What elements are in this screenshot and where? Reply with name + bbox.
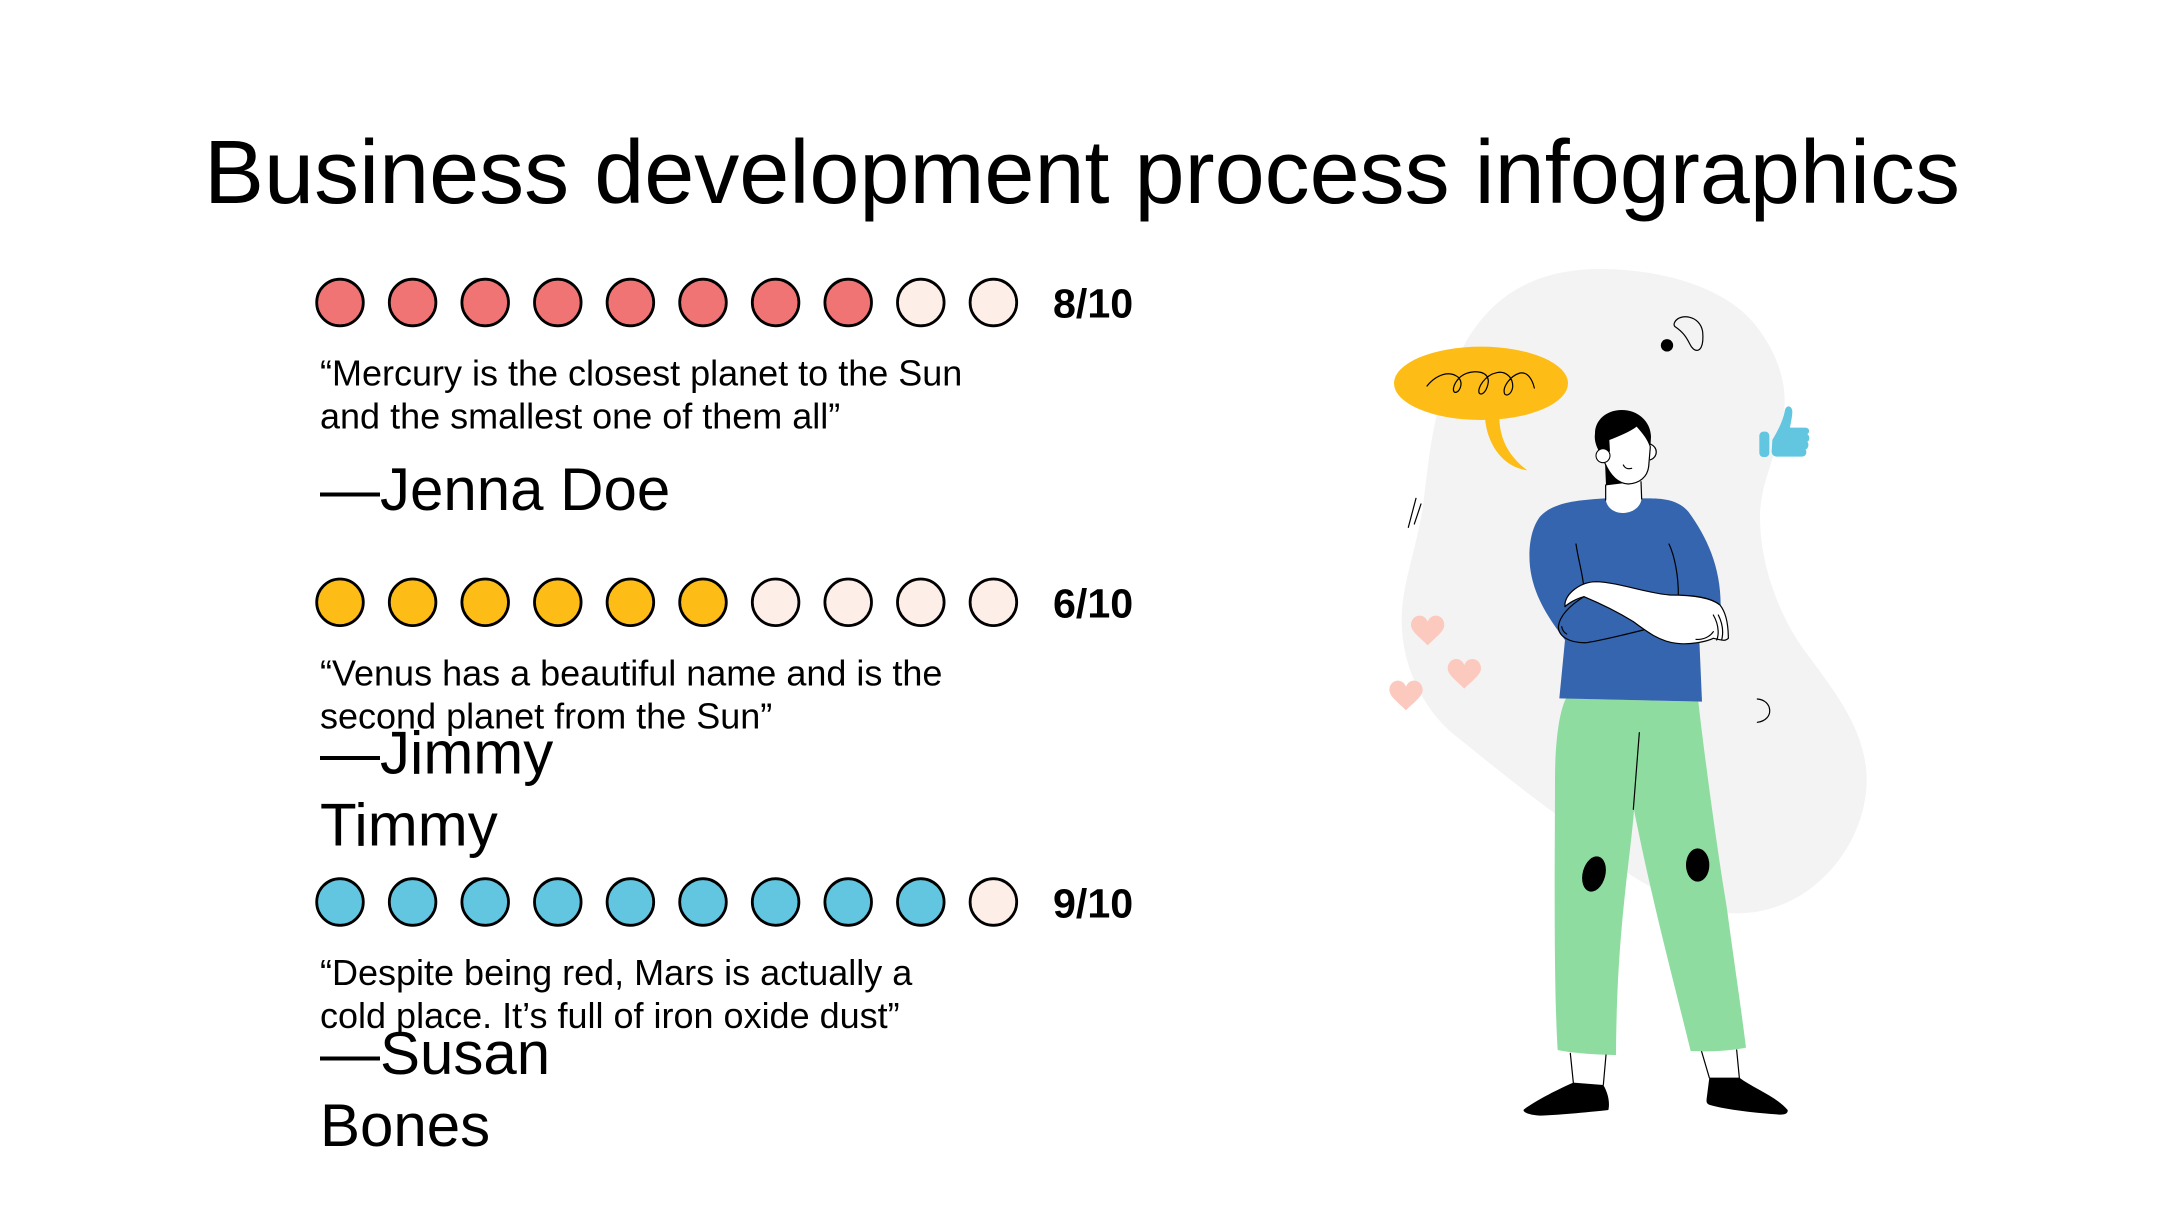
quote: and the smallest one of them all” bbox=[320, 396, 840, 436]
panel: testimonial Susan Bones bbox=[317, 879, 1133, 1159]
icon: hearts bbox=[1389, 616, 1481, 710]
background blob bbox=[1402, 269, 1867, 913]
hair bbox=[1595, 410, 1651, 452]
rating dots 9 of 10 bbox=[317, 879, 1017, 925]
icon: speech bubble bbox=[1394, 347, 1568, 470]
icon: thumbs up bbox=[1759, 406, 1809, 457]
author: —Jenna Doe bbox=[320, 456, 670, 523]
crossed arms bbox=[1565, 582, 1728, 644]
author: Bones bbox=[320, 1092, 490, 1159]
right ear bbox=[1650, 444, 1656, 460]
left ear bbox=[1596, 449, 1610, 463]
quote: “Mercury is the closest planet to the Sun bbox=[320, 352, 962, 394]
author: —Jimmy bbox=[320, 720, 553, 786]
trousers bbox=[1524, 698, 1788, 1116]
score: 6/10 bbox=[1053, 580, 1133, 626]
score: 9/10 bbox=[1053, 880, 1133, 926]
quote: second planet from the Sun” bbox=[320, 696, 772, 736]
author: —Susan bbox=[320, 1020, 550, 1087]
quote: “Despite being red, Mars is actually a bbox=[320, 952, 913, 993]
score: 8/10 bbox=[1053, 280, 1133, 326]
neck bbox=[1606, 480, 1642, 513]
face bbox=[1602, 427, 1650, 484]
icon: moon arc bbox=[1757, 699, 1770, 722]
neck shadow bbox=[1605, 462, 1628, 485]
panel: testimonial Jimmy Timmy bbox=[317, 579, 1133, 858]
illustration: thoughtful man bbox=[1389, 269, 1867, 1116]
panel: testimonial Jenna Doe bbox=[317, 279, 1133, 523]
rating dots 6 of 10 bbox=[317, 579, 1017, 626]
quote: “Venus has a beautiful name and is the bbox=[320, 652, 942, 694]
quote: cold place. It’s full of iron oxide dust” bbox=[320, 995, 900, 1036]
sleeve lines bbox=[1576, 544, 1678, 594]
rating dots 8 of 10 bbox=[317, 279, 1017, 326]
decorative strokes bbox=[1408, 498, 1421, 527]
title: Business development process infographics bbox=[204, 123, 1960, 223]
smile bbox=[1623, 465, 1632, 469]
shirt bbox=[1529, 498, 1721, 702]
author: Timmy bbox=[320, 792, 498, 858]
icon: squiggle and dot bbox=[1661, 317, 1703, 351]
